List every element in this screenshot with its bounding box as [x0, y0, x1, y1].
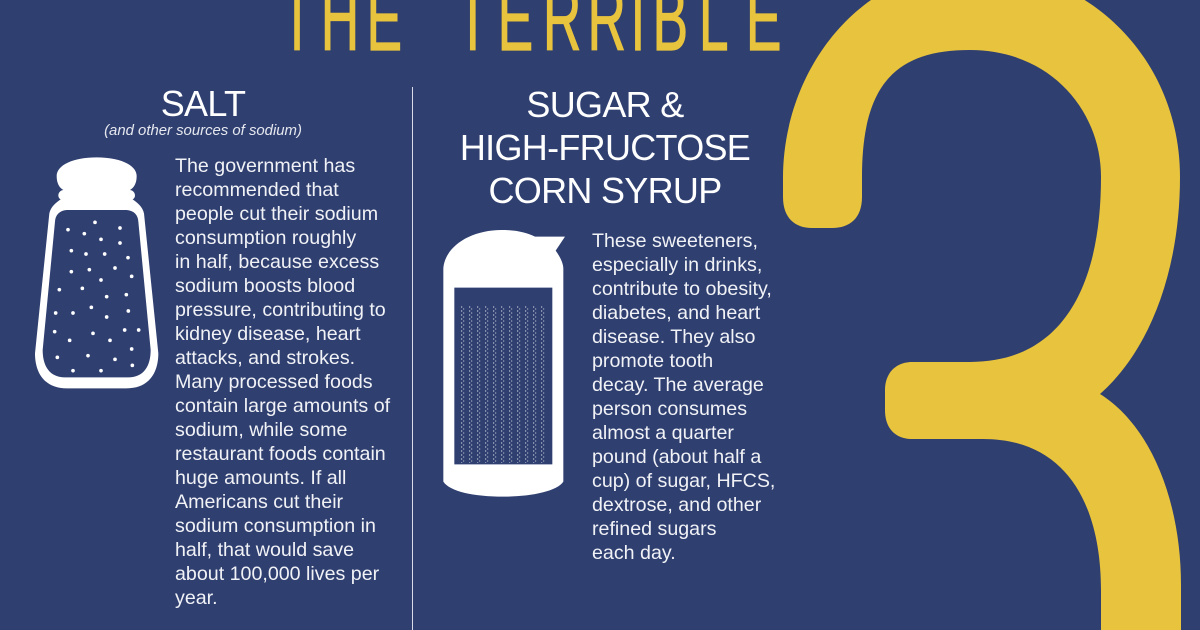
body text: salt: sodium boosts blood — [175, 275, 355, 297]
body text: sugar: cup) of sugar, HFCS, — [592, 470, 775, 492]
body text: salt: restaurant foods contain — [175, 443, 386, 465]
body text: salt — [175, 155, 390, 609]
body text: salt: huge amounts. If all — [175, 467, 346, 489]
heading: salt: SALT — [161, 83, 245, 124]
body text: salt: attacks, and strokes. — [175, 347, 355, 369]
body text: salt: half, that would save — [175, 539, 354, 561]
body text: sugar: especially in drinks, — [592, 254, 762, 276]
body text: sugar: decay. The average — [592, 374, 764, 396]
panel: sugar and high-fructose corn syrup — [443, 84, 775, 564]
title: THE TERRIBLE — [281, 0, 781, 56]
icon: sugar dispenser — [443, 230, 565, 497]
body text: sugar: person consumes — [592, 398, 747, 420]
body text: salt: year. — [175, 587, 218, 609]
body text: salt: consumption roughly — [175, 227, 356, 249]
body text: salt: Americans cut their — [175, 491, 343, 513]
body text: salt: The government has — [175, 155, 355, 177]
body text: salt: contain large amounts of — [175, 395, 390, 417]
body text: sugar: each day. — [592, 542, 676, 564]
heading: sugar and high-fructose corn syrup: HIGH-FRUCTOSE — [460, 127, 750, 168]
heading: sugar and high-fructose corn syrup: SUGAR & — [526, 84, 684, 125]
heading: sugar and high-fructose corn syrup: CORN SYRUP — [488, 170, 722, 211]
panel: salt — [35, 83, 390, 609]
body text: salt: kidney disease, heart — [175, 323, 361, 345]
body text: sugar — [592, 230, 775, 564]
body text: sugar: almost a quarter — [592, 422, 734, 444]
body text: sugar: refined sugars — [592, 518, 716, 540]
body text: salt: recommended that — [175, 179, 339, 201]
body text: salt: about 100,000 lives per — [175, 563, 379, 585]
body text: sugar: dextrose, and other — [592, 494, 761, 516]
body text: sugar: promote tooth — [592, 350, 713, 372]
body text: salt: sodium consumption in — [175, 515, 376, 537]
icon: salt shaker — [35, 157, 158, 388]
body text: salt: in half, because excess — [175, 251, 379, 273]
body text: salt: people cut their sodium — [175, 203, 378, 225]
body text: sugar: These sweeteners, — [592, 230, 758, 252]
heading: sugar and high-fructose corn syrup — [460, 84, 750, 211]
giant numeral 3 — [783, 0, 1181, 630]
body text: sugar: diabetes, and heart — [592, 302, 760, 324]
body text: sugar: disease. They also — [592, 326, 755, 348]
body text: sugar: pound (about half a — [592, 446, 761, 468]
body text: salt: pressure, contributing to — [175, 299, 386, 321]
subheading: other sources of sodium: (and other sources of sodium) — [104, 123, 302, 139]
body text: salt: sodium, while some — [175, 419, 347, 441]
body text: sugar: contribute to obesity, — [592, 278, 772, 300]
body text: salt: Many processed foods — [175, 371, 373, 393]
